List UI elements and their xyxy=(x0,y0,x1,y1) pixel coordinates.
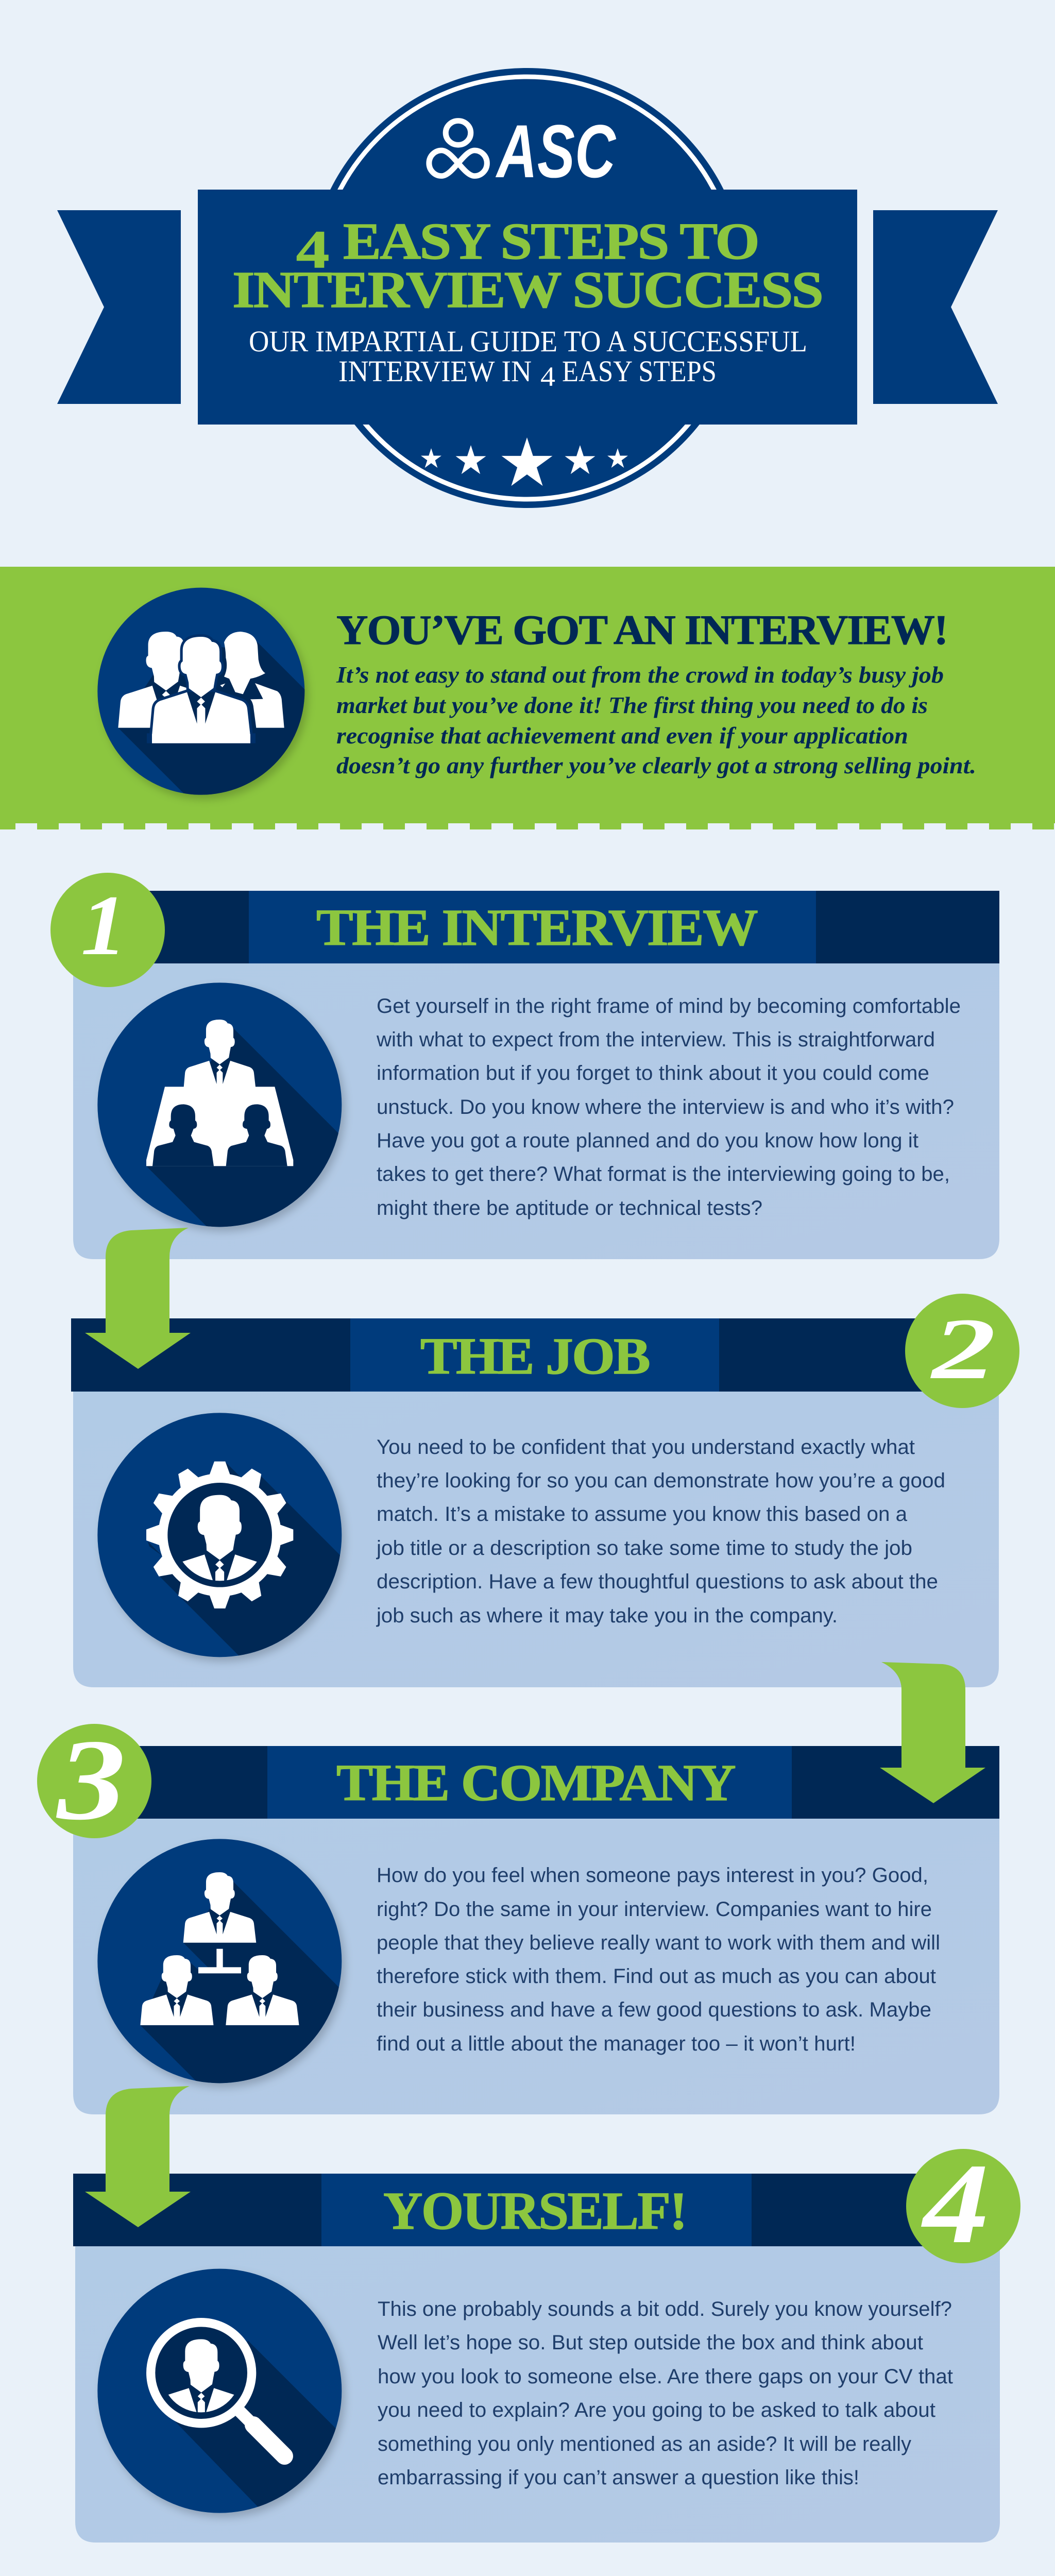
body text: Well let’s hope so. But step outside the box and think about xyxy=(378,2331,923,2354)
body text xyxy=(378,2298,953,2489)
body text: how you look to someone else. Are there gaps on your CV that xyxy=(378,2365,953,2388)
arrow: step 1 to step 2 xyxy=(85,1228,191,1369)
panel body xyxy=(73,963,999,1259)
intro text: It’s not easy to stand out from the crowd in today’s busy job xyxy=(336,662,944,688)
header bar xyxy=(73,2174,999,2246)
panel: step 4 yourself xyxy=(73,2140,1020,2559)
panel: step 2 the job xyxy=(71,1294,1019,1713)
header badge xyxy=(57,68,998,508)
title: EASY STEPS TO xyxy=(343,212,758,270)
heading: THE INTERVIEW xyxy=(316,899,758,956)
icon: left ribbon xyxy=(57,210,181,404)
header bar xyxy=(103,1746,999,1819)
intro text: doesn’t go any further you’ve clearly got a strong selling point. xyxy=(336,753,976,778)
panel body xyxy=(75,2246,1000,2543)
number badge 1: 1 xyxy=(81,878,127,973)
subtitle: OUR IMPARTIAL GUIDE TO A SUCCESSFUL xyxy=(249,325,807,358)
body text xyxy=(377,1864,940,2055)
heading: YOURSELF! xyxy=(383,2181,686,2241)
subtitle: INTERVIEW IN xyxy=(338,354,532,388)
body text: description. Have a few thoughtful questions to ask about the xyxy=(377,1570,938,1593)
title: INTERVIEW SUCCESS xyxy=(232,261,822,318)
body text: You need to be confident that you understand exactly what xyxy=(377,1436,915,1459)
icon: interview panel xyxy=(97,982,349,1235)
number badge 1 xyxy=(50,873,165,987)
icon: magnifier with person xyxy=(97,2269,349,2521)
logo: ASC white xyxy=(429,109,617,193)
icon: five stars xyxy=(421,437,628,486)
body text: right? Do the same in your interview. Companies want to hire xyxy=(377,1898,932,1921)
number badge 4 xyxy=(906,2140,1020,2267)
body text: people that they believe really want to work with them and will xyxy=(377,1931,940,1954)
logo: ASC white: ASC xyxy=(496,109,617,193)
body text: embarrassing if you can’t answer a question like this! xyxy=(378,2466,859,2489)
body text: they’re looking for so you can demonstrate how you’re a good xyxy=(377,1469,945,1492)
subtitle xyxy=(249,325,807,392)
icon: gear with person xyxy=(97,1413,349,1665)
icon: org chart xyxy=(97,1839,349,2091)
arrow: step 3 to step 4 xyxy=(85,2086,191,2227)
number badge 2 xyxy=(905,1294,1019,1408)
title: 4 xyxy=(296,220,329,279)
body text xyxy=(376,995,961,1219)
body text: Have you got a route planned and do you know how long it xyxy=(377,1129,918,1152)
body text xyxy=(376,1436,945,1627)
body text: something you only mentioned as an aside? It will be really xyxy=(378,2433,911,2455)
panel: step 3 the company xyxy=(37,1724,999,2114)
panel body xyxy=(73,1819,999,2114)
icon: right ribbon xyxy=(873,210,998,404)
body text: their business and have a few good questions to ask. Maybe xyxy=(377,1998,931,2021)
body text: How do you feel when someone pays interest in you? Good, xyxy=(377,1864,928,1887)
body text: find out a little about the manager too – it won’t hurt! xyxy=(377,2032,856,2055)
arrow: step 2 to step 3 xyxy=(880,1662,985,1803)
body text: information but if you forget to think about it you could come xyxy=(377,1062,929,1084)
number badge 3 xyxy=(37,1715,151,1844)
subtitle: EASY STEPS xyxy=(562,354,717,388)
heading: THE JOB xyxy=(420,1327,649,1385)
number badge 4: 4 xyxy=(921,2140,989,2267)
body text: Get yourself in the right frame of mind by becoming comfortable xyxy=(377,995,961,1018)
body text: therefore stick with them. Find out as much as you can about xyxy=(377,1965,936,1988)
number badge 3: 3 xyxy=(56,1715,126,1844)
panel: step 1 the interview xyxy=(50,873,999,1271)
subtitle: 4 xyxy=(540,361,555,392)
panel body xyxy=(73,1392,999,1687)
header bar xyxy=(103,891,999,963)
body text: This one probably sounds a bit odd. Surely you know yourself? xyxy=(378,2298,952,2320)
heading: THE COMPANY xyxy=(336,1754,736,1811)
intro text: market but you’ve done it! The first thing you need to do is xyxy=(336,692,928,718)
intro text: recognise that achievement and even if your application xyxy=(336,723,908,749)
number badge 2: 2 xyxy=(930,1300,996,1397)
title xyxy=(232,212,822,318)
body text: with what to expect from the interview. This is straightforward xyxy=(376,1028,935,1051)
body text: unstuck. Do you know where the interview is and who it’s with? xyxy=(377,1096,954,1118)
badge circle xyxy=(307,68,747,508)
body text: takes to get there? What format is the interviewing going to be, xyxy=(377,1163,950,1185)
heading: YOU’VE GOT AN INTERVIEW! xyxy=(336,606,947,653)
body text: job title or a description so take some time to study the job xyxy=(376,1537,912,1560)
title plate xyxy=(198,190,857,425)
icon: three people xyxy=(97,587,311,803)
body text: match. It’s a mistake to assume you know this based on a xyxy=(377,1503,908,1526)
intro text xyxy=(336,662,976,778)
body text: you need to explain? Are you going to be asked to talk about xyxy=(378,2399,935,2421)
header bar xyxy=(71,1318,999,1392)
body text: might there be aptitude or technical tests? xyxy=(377,1197,762,1219)
panel: you've got an interview xyxy=(0,567,1055,840)
body text: job such as where it may take you in the company. xyxy=(376,1604,838,1627)
